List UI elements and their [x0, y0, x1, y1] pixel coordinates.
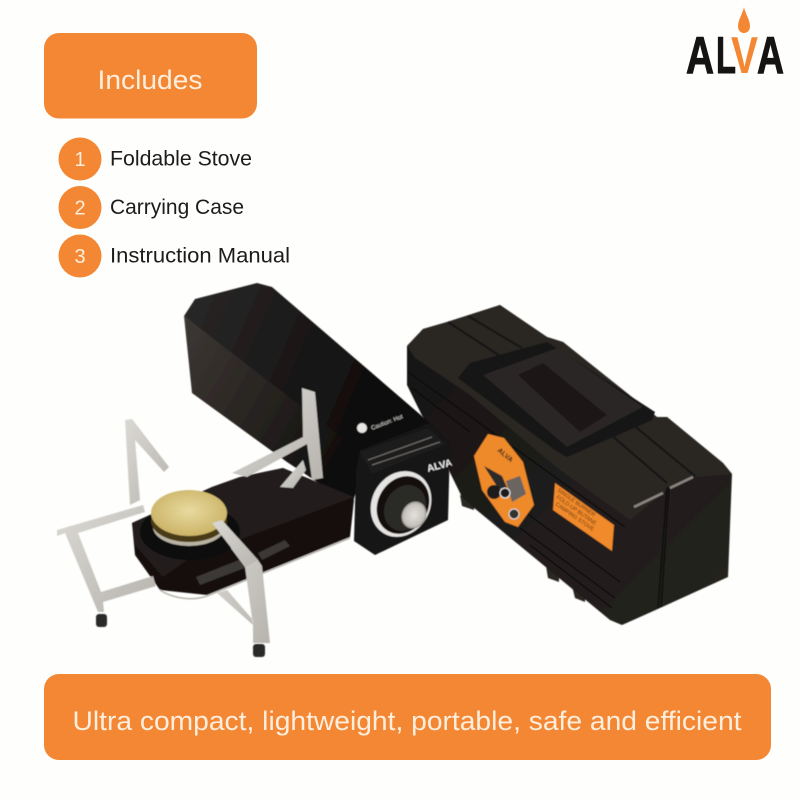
icon: flame — [738, 7, 750, 33]
item 2: Carrying Case: Carrying Case — [110, 196, 244, 219]
orange hexagon badge — [474, 434, 534, 527]
stove base — [132, 468, 354, 599]
support feet — [96, 614, 107, 627]
callout: tagline: Ultra compact, lightweight, portable, safe and efficient — [72, 706, 742, 736]
left support — [57, 505, 156, 612]
front support — [212, 520, 270, 643]
item 1: Foldable Stove: 1 — [74, 149, 86, 171]
orange warning label: CAMPING STOVE — [554, 502, 595, 533]
heading: Includes: Includes — [98, 65, 202, 95]
silver pot supports — [57, 388, 323, 643]
orange warning label: SINGLE BURNER — [556, 488, 596, 518]
orange warning label — [553, 483, 614, 551]
case end seams — [658, 487, 669, 608]
case feet — [460, 495, 585, 602]
back support — [125, 419, 169, 505]
control dial — [359, 460, 443, 548]
callout: tagline — [44, 674, 771, 760]
product: carrying case — [407, 305, 732, 625]
stove case side — [184, 316, 368, 505]
product: foldable stove — [57, 283, 454, 657]
item 2: Carrying Case: 2 — [74, 198, 86, 220]
handle grip — [518, 363, 607, 432]
burner — [140, 490, 258, 567]
orange warning label: FOLD-UP BUTANE — [555, 495, 597, 527]
cap logo: ALVA — [426, 458, 454, 475]
case top ridges — [448, 316, 695, 483]
stove front cap: Caution: Hot — [371, 414, 404, 432]
case seam highlights — [634, 477, 693, 507]
item 3: Instruction Manual — [58, 234, 290, 278]
logo: ALVA: A — [757, 27, 784, 85]
item 1: Foldable Stove — [58, 138, 252, 180]
item 2: Carrying Case — [58, 186, 244, 229]
logo: ALVA: V — [731, 27, 758, 85]
item 3: Instruction Manual: 3 — [74, 246, 86, 268]
case side ribs — [408, 372, 625, 608]
case top face — [407, 305, 732, 520]
right support — [232, 388, 323, 480]
case handle frame — [458, 342, 655, 457]
logo: ALVA: L — [716, 27, 736, 85]
logo: ALVA: A — [686, 27, 714, 85]
caution label — [357, 423, 367, 433]
item 3: Instruction Manual: Instruction Manual — [110, 244, 290, 268]
stove front cap — [354, 414, 454, 555]
vent holes — [196, 558, 250, 585]
logo: ALVA — [686, 7, 784, 85]
item 1: Foldable Stove: Foldable Stove — [110, 148, 252, 170]
case body — [407, 305, 732, 625]
stove case top — [184, 283, 430, 452]
orange hexagon badge: ALVA — [496, 447, 514, 464]
heading: Includes — [44, 33, 257, 118]
list of included items — [58, 138, 290, 278]
